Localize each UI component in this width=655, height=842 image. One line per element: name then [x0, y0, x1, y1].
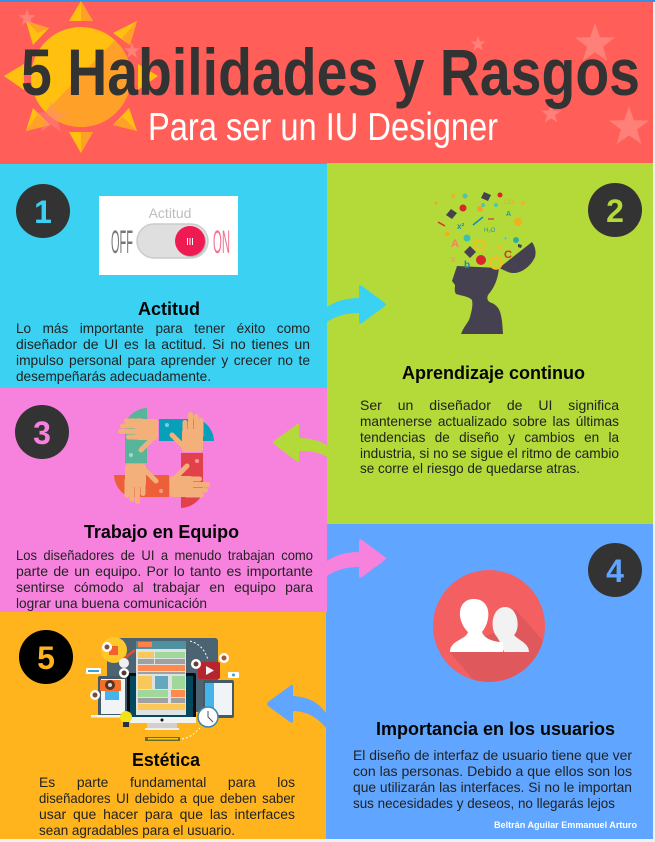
text block: Es parte fundamental para los: [39, 774, 295, 790]
text block: con las personas. Debido a que ellos son los: [353, 763, 632, 779]
text block: usar que hacer para que las interfaces: [39, 806, 295, 822]
text block: mantenerse actualizado sobre las últimas: [360, 413, 619, 429]
text block: El diseño de interfaz de usuario tiene que ver: [353, 747, 632, 763]
text block: diseñador de UI es la actitud. Si no tienes un: [16, 336, 310, 352]
icon: open head with ideas: b: [464, 260, 470, 271]
number badge 4: [588, 543, 642, 597]
heading: Importancia en los usuarios: [376, 719, 615, 739]
icon: open head with ideas: x: [451, 254, 456, 264]
text block: industria, si no se sigue el ritmo de cambio: [360, 445, 619, 461]
number badge 3: 3: [33, 415, 51, 451]
heading: Estética: [132, 750, 201, 770]
arrow: 2 to 3: [273, 424, 327, 462]
icon: open head with ideas: A: [506, 211, 511, 218]
text block: sean agradables para el usuario.: [39, 822, 235, 838]
panel: 2 aprendizaje continuo: [327, 163, 653, 525]
arrow: 3 to 4: [327, 539, 386, 578]
arrow: 4 to 5: [267, 685, 326, 728]
number badge 3: [15, 405, 69, 459]
icon: open head with ideas: CO₂: [504, 200, 516, 206]
text block: Los diseñadores de UI a menudo trabajan como: [16, 547, 313, 563]
number badge 2: 2: [606, 193, 624, 229]
subtitle: Para ser un IU Designer: [148, 106, 498, 149]
icon: open head with ideas: x²: [457, 222, 464, 231]
text block: parte de un equipo. Por lo tanto es importante: [16, 563, 313, 579]
heading: Actitud: [138, 299, 200, 319]
number badge 5: 5: [37, 640, 55, 676]
text block: [16, 547, 313, 611]
heading: Trabajo en Equipo: [84, 522, 239, 542]
heading: Aprendizaje continuo: [402, 363, 585, 383]
icon: users: [433, 570, 545, 682]
icon: open head with ideas: A: [451, 238, 459, 250]
icon: sun: [4, 1, 158, 153]
panel: header: [0, 0, 655, 164]
panel: 3 trabajo en equipo: [0, 388, 327, 612]
text block: sentirse cómodo al trabajar en equipo para: [16, 579, 313, 595]
icon: four hands: [114, 408, 214, 508]
icon: open head with ideas: H₂O: [484, 228, 496, 234]
credit: Beltrán Aguilar Emmanuel Arturo: [494, 820, 638, 830]
panel: 1 actitud: [0, 164, 327, 388]
icon: open head with ideas: +: [503, 234, 508, 243]
text block: tendencias de diseño y cambios en la: [360, 429, 619, 445]
text block: Ser un diseñador de UI significa: [360, 397, 619, 413]
text block: desempeñarás adecuadamente.: [16, 368, 211, 384]
number badge 1: 1: [34, 194, 52, 230]
icon: toggle switch: ON: [213, 224, 230, 260]
text block: lograr una buena comunicación: [16, 595, 207, 611]
text block: diseñadores UI debido a que deben saber: [39, 790, 295, 806]
icon: devices: [86, 637, 239, 741]
panel: 5 estetica: [0, 612, 326, 839]
text block: [360, 397, 619, 476]
text block: Lo más importante para tener éxito como: [16, 320, 310, 336]
icon: open head with ideas: C: [504, 249, 512, 261]
icon: open head with ideas: [434, 192, 536, 334]
icon: toggle switch: Actitud: [149, 205, 191, 221]
panel: 4 importancia en los usuarios: [326, 524, 653, 839]
number badge 4: 4: [606, 553, 624, 589]
text block: que utilizarán las interfaces. Si no le importan: [353, 779, 632, 795]
icon: toggle switch: OFF: [111, 224, 133, 260]
text block: [16, 320, 310, 384]
decorative stars: [18, 9, 649, 144]
text block: [39, 774, 295, 838]
number badge 5: [19, 630, 73, 684]
arrow: 1 to 2: [327, 285, 386, 324]
text block: se corre el riesgo de quedarse atras.: [360, 460, 580, 476]
text block: [353, 747, 632, 811]
number badge 2: [588, 183, 642, 237]
icon: toggle switch: [99, 196, 238, 275]
text block: sus necesidades y deseos, no llegarás lejos: [353, 795, 615, 811]
text block: impulso personal para aprender y crecer no te: [16, 352, 310, 368]
number badge 1: [16, 184, 70, 238]
